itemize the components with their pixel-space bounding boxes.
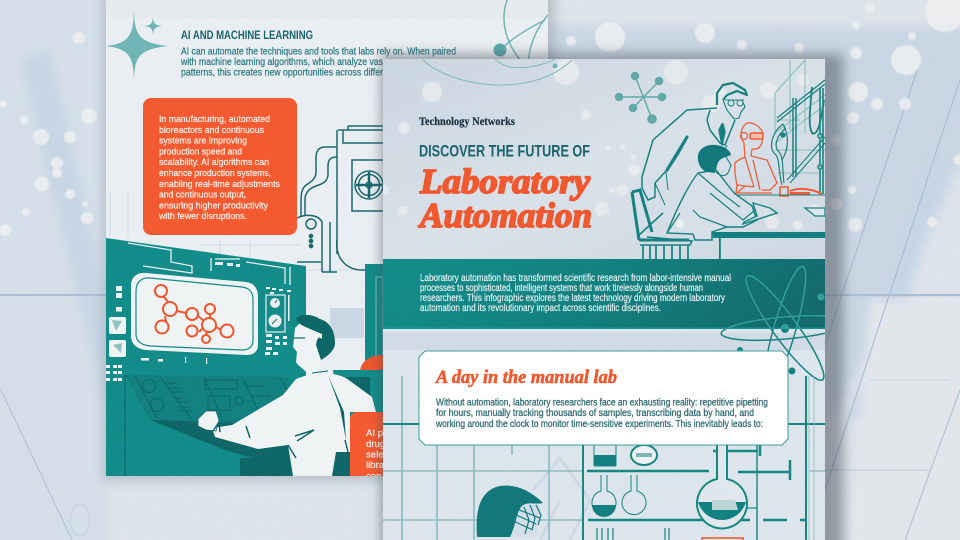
intro text: AI and machine learning: AI can automate the techniques and tools that labs rely on. When paired xyxy=(181,46,456,58)
machine line art xyxy=(297,126,392,272)
control desk xyxy=(125,375,300,476)
lab illustration: glassware xyxy=(592,445,757,540)
atom graphic in band xyxy=(724,266,825,329)
teal intro band: Laboratory automation has transformed scientific research from labor-intensive manual xyxy=(420,273,731,284)
panel: orange manufacturing callout: In manufacturing, automated xyxy=(159,114,270,125)
icon: molecule star xyxy=(616,72,666,123)
panel: orange callout clipped: sele xyxy=(366,450,384,460)
panel: orange callout clipped xyxy=(350,412,383,476)
illustration: desk xyxy=(712,232,825,259)
gauge panel xyxy=(266,295,285,332)
panel: orange manufacturing callout: production speed and xyxy=(159,146,242,157)
body text: manual lab xyxy=(435,398,768,430)
teal intro band: researchers. This infographic explores the latest technology driving modern laboratory xyxy=(420,293,725,304)
lab illustration: background grid xyxy=(383,376,825,540)
panel: orange manufacturing callout: bioreactors and continuous xyxy=(159,125,264,136)
panel: orange manufacturing callout: systems are improving xyxy=(159,136,247,147)
illustration: seated scientist xyxy=(667,145,777,240)
shadow: left page xyxy=(104,0,554,480)
panel: teal control console xyxy=(106,238,383,476)
body text: manual lab: working around the clock to monitor time-sensitive experiments. This inevitably leads to: xyxy=(435,419,763,430)
teal intro band: processes to sophisticated, intelligent systems that work tirelessly alongside human xyxy=(420,283,703,294)
panel: orange manufacturing callout: with fewer disruptions. xyxy=(158,211,247,222)
panel: orange callout clipped: AI p xyxy=(366,428,383,439)
panel: orange callout clipped: libra xyxy=(366,460,385,471)
atom ring over page top xyxy=(423,59,572,85)
panel: orange callout clipped: con xyxy=(366,471,381,482)
shadow: right page xyxy=(381,54,843,540)
heading: Discover the future of: DISCOVER THE FUTURE OF xyxy=(419,142,590,160)
panel: orange callout clipped: drug xyxy=(366,439,385,450)
panel: a day in the manual lab xyxy=(419,351,788,445)
illustration: chair xyxy=(632,190,692,259)
illustration: standing scientist xyxy=(642,83,747,205)
intro text: AI and machine learning xyxy=(180,46,456,78)
molecule diagram xyxy=(155,285,234,343)
intro text: AI and machine learning: with machine learning algorithms, which analyze vas xyxy=(180,57,383,68)
body text: manual lab: Without automation, laboratory researchers face an exhausting reality: repetitive pipetting xyxy=(436,398,768,408)
title: Laboratory Automation: Automation xyxy=(418,196,592,235)
teal intro band: automation and its revolutionary impact across scientific disciplines. xyxy=(420,303,661,314)
scientist at the console xyxy=(198,315,383,476)
illustration: robotic lab apparatus xyxy=(737,60,825,216)
panel: orange manufacturing callout: and continuous output, xyxy=(159,190,246,201)
teal intro band xyxy=(383,259,825,329)
illustration: red scientist with visor xyxy=(735,123,777,193)
monitor with molecule xyxy=(131,273,258,355)
icon: orange helmet xyxy=(360,355,383,370)
heading: a day in the manual lab: A day in the manual lab xyxy=(435,367,617,388)
lab illustration: tired researcher xyxy=(477,486,543,537)
header bokeh xyxy=(379,59,821,230)
icon: atom on left page xyxy=(494,0,548,65)
console buttons xyxy=(106,286,291,381)
panel: orange manufacturing callout: scalability. AI algorithms can xyxy=(159,157,269,168)
logo: Technology Networks: Technology Networks xyxy=(419,116,515,128)
panel: orange manufacturing callout: enhance production systems, xyxy=(159,168,271,179)
atom graphic below band xyxy=(720,329,825,381)
icon: small sparkle xyxy=(143,16,163,36)
body text: manual lab: for hours, manually tracking thousands of samples, transcribing data by hand, and xyxy=(436,408,754,419)
icon: large sparkle xyxy=(106,10,169,81)
intro text: AI and machine learning: patterns, this creates new opportunities across differ xyxy=(181,68,384,78)
left page xyxy=(106,0,548,492)
title: Laboratory Automation: Laboratory xyxy=(419,162,590,201)
panel: orange manufacturing callout xyxy=(143,98,297,235)
title: Laboratory Automation xyxy=(417,168,592,228)
panel: orange manufacturing callout: enabling real-time adjustments xyxy=(159,179,280,190)
heading: AI and machine learning: AI AND MACHINE LEARNING xyxy=(181,28,313,42)
lab illustration: shelves xyxy=(583,376,814,540)
panel: orange manufacturing callout: ensuring higher productivity xyxy=(159,200,268,211)
right page xyxy=(379,59,850,540)
